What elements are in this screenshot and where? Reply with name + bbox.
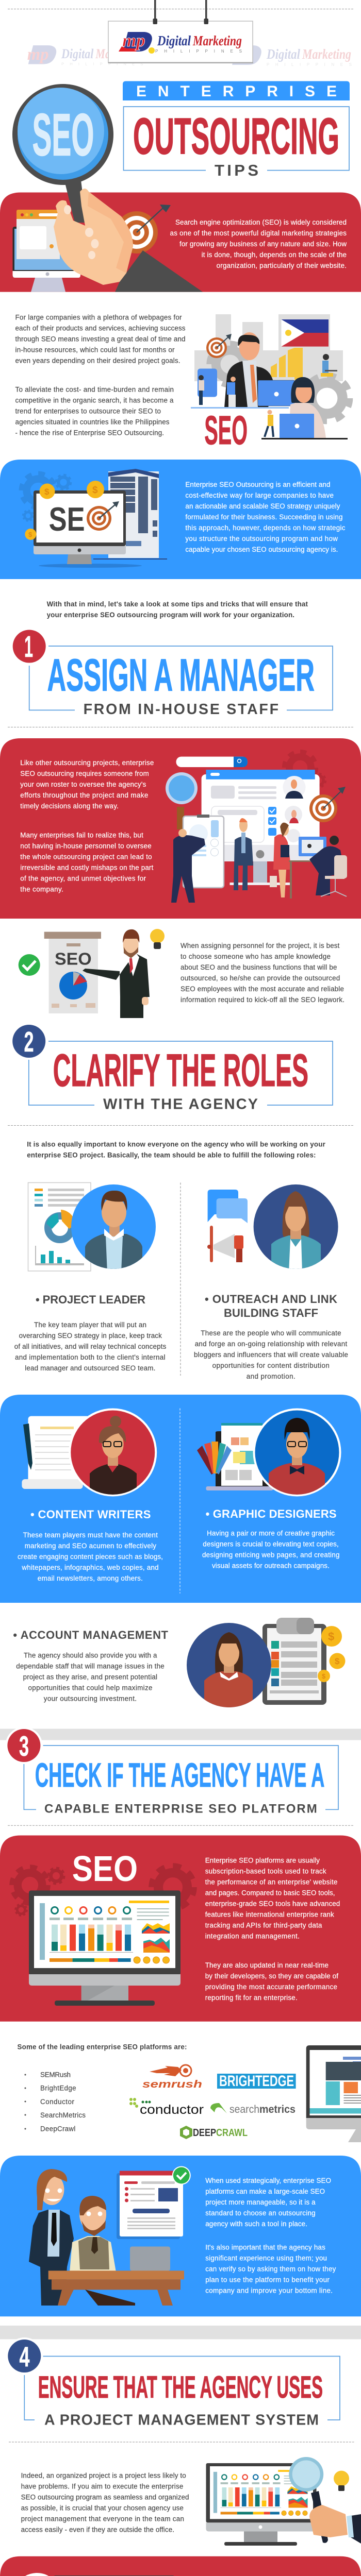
dashed divider	[8, 1825, 353, 1826]
role description: lead manager and outsourced SEO team.	[25, 1364, 155, 1372]
role description: overarching SEO strategy in place, keep track	[19, 1332, 162, 1340]
list: SEO platforms: Conductor	[40, 2098, 75, 2106]
icon: light bulb	[150, 929, 165, 949]
text: features like international enterprise rank	[205, 1910, 334, 1919]
illustration: dashboard monitor with magnifier and bulb	[206, 2457, 361, 2546]
role description: marketing and SEO acumen to effectively	[25, 1542, 156, 1550]
text: Like other outsourcing projects, enterprise	[20, 759, 154, 767]
text: project more manageable, so it is a	[205, 2198, 316, 2206]
text block: with that in mind: your enterprise SEO outsourcing program will work for your organization.	[47, 611, 294, 619]
logo: Marketing	[192, 33, 242, 48]
role description: your outsourcing investment.	[44, 1695, 137, 1702]
role description: dependable staff that will manage issues in the	[16, 1662, 165, 1670]
logo: brightedge: BRIGHTEDGE	[219, 2073, 294, 2090]
text: this approach, however, depends on how strategic	[185, 524, 346, 532]
ghost logo right	[232, 45, 352, 67]
text block: to alleviate	[15, 385, 174, 437]
text: tracking and APIs for third-party data	[205, 1922, 322, 1929]
logo: Digital	[157, 33, 191, 48]
text: of the agency, and unmet objectives for	[20, 875, 146, 882]
heading: tip 1: FROM IN-HOUSE STAFF	[84, 701, 278, 718]
text: When used strategically, enterprise SEO	[205, 2177, 331, 2184]
role description: These team players must have the content	[23, 1531, 158, 1539]
intro text: organization, particularly of their website.	[217, 262, 347, 269]
text: the whole outsourcing project can lead to	[20, 853, 152, 860]
band: section 4 gray	[0, 2326, 361, 2339]
illustration: outsourcing team with flag and SEO	[191, 314, 349, 453]
text: Many enterprises fail to realize this, but	[20, 832, 143, 839]
text block: organized project	[21, 2472, 189, 2534]
text block: team roles intro	[27, 1141, 326, 1159]
illustration: hand holding magnifying glass: SEO	[32, 101, 94, 168]
coins: $	[28, 531, 32, 538]
logo: conductor	[129, 2098, 204, 2117]
illustration: presenter with SEO board: SEO	[55, 950, 92, 969]
logo: searchmetrics	[210, 2103, 296, 2115]
band: section 3 gray	[0, 1729, 361, 1740]
text: the performance of an enterprise' website	[205, 1878, 337, 1886]
panel: strategic use blue	[0, 2156, 361, 2316]
ghost logo left: Marketing	[95, 46, 142, 61]
text: subscription-based tools used to track	[205, 1867, 326, 1875]
logo: PHILIPPINES	[155, 49, 242, 54]
text block: to alleviate: To alleviate the cost- and time-burden and remain	[15, 385, 174, 394]
flag	[282, 319, 329, 347]
role description: These are the people who will communicate	[201, 1329, 341, 1337]
role title: BUILDING STAFF	[224, 1307, 318, 1319]
text: capable your chosen SEO outsourcing agency is.	[185, 546, 338, 553]
illustration: monitor with dashboard	[12, 1849, 193, 2006]
heading: tip 1: 1	[24, 630, 33, 664]
heading: tip 4: A PROJECT MANAGEMENT SYSTEM	[44, 2412, 319, 2429]
hand	[309, 2505, 361, 2544]
text: standard to choose an outsourcing	[205, 2209, 316, 2217]
role description: opportunities for content distribution	[212, 1362, 330, 1369]
seated man and desk	[289, 836, 347, 899]
dashed divider	[8, 1125, 353, 1126]
panel: SEO platforms red	[0, 1835, 361, 2022]
browser card	[117, 2171, 183, 2239]
role title: • GRAPHIC DESIGNERS	[206, 1507, 337, 1520]
magnifier	[289, 2457, 328, 2543]
title: Outsourcing frame: TIPS	[215, 161, 258, 179]
woman	[289, 377, 326, 438]
text block: organized project: have problems. If you aim to execute the enterprise	[21, 2482, 183, 2490]
role description	[18, 1531, 163, 1582]
role description	[14, 1321, 167, 1372]
text block: when assigning personnel: to choose someone who has ample knowledge	[180, 953, 331, 960]
text: and pages. Compared to basic SEO tools,	[205, 1889, 335, 1897]
panel: assign a manager red	[0, 738, 361, 919]
text: not having in-house personnel to oversee	[20, 842, 152, 850]
text: cost-effective way for large companies to have	[185, 492, 334, 499]
role description	[194, 1329, 348, 1380]
text: SEO outsourcing requires someone from	[20, 770, 149, 777]
logo: deepcrawl: DEEP	[193, 2127, 216, 2139]
ghost logo left: Digital	[61, 46, 94, 61]
role title	[205, 1293, 337, 1319]
text: formulated for their business. Succeeding in using	[185, 513, 342, 521]
top dashed rule	[8, 8, 353, 9]
text block: organized project: project management that everyone in the team can	[21, 2515, 184, 2522]
illustration: cloud, servers and monitor	[10, 2573, 174, 2576]
intro text: Search engine optimization (SEO) is widely considered	[175, 218, 347, 226]
text block: when assigning personnel: outsourced, so he/she can provide the outsourced	[180, 974, 340, 982]
text: integration and management.	[205, 1932, 300, 1940]
text block: when assigning personnel: SEO employees with the most accurate and reliable	[180, 985, 344, 993]
illustration: two men at desk with browser card	[29, 2166, 191, 2306]
ghost logo right: Digital	[266, 46, 300, 62]
standing man	[29, 2169, 74, 2306]
ghost logo right: PHILIPPINES	[267, 62, 352, 67]
role: graphic designers	[197, 1409, 341, 1569]
text: by their developers, so they are capable of	[205, 1972, 338, 1980]
role description: whitepapers, infographics, web copies, and	[21, 1564, 159, 1571]
heading: tip 2	[12, 1025, 333, 1113]
text block: organized project: access easily - even if they are outside the office.	[21, 2526, 174, 2534]
text: the company.	[20, 885, 63, 893]
text block: to alleviate: trend for enterprises to outsource their SEO to	[15, 407, 161, 415]
text block: to alleviate: agencies situated in countries like the Philippines	[15, 418, 170, 426]
man left	[171, 829, 205, 903]
man	[83, 929, 150, 1018]
list: SEO platforms: DeepCrawl	[40, 2125, 75, 2133]
man in suit	[224, 332, 274, 408]
pie chart	[59, 972, 87, 999]
role: content writers	[18, 1409, 163, 1582]
role description: bloggers and influencers that will create valuable	[194, 1351, 348, 1359]
role description	[202, 1529, 339, 1569]
text block: organized project: Indeed, an organized project is a project less likely to	[21, 2472, 186, 2479]
icon: green check	[19, 954, 40, 976]
text block: to alleviate: competitive in the organic search, it has become a	[15, 397, 174, 404]
role title: • CONTENT WRITERS	[30, 1508, 151, 1521]
text	[205, 2177, 336, 2295]
text	[185, 481, 346, 553]
text block: when assigning personnel: When assigning personnel for the project, it is best	[180, 942, 340, 950]
seated man	[70, 2196, 116, 2272]
logo: deepcrawl: CRAWL	[216, 2127, 248, 2139]
text: providing the most accurate performance	[205, 1983, 337, 1991]
text block: with that in mind	[47, 600, 308, 619]
role description: project as they arise, and present potential	[23, 1673, 157, 1681]
SEO lettering: SEO	[204, 407, 248, 453]
illustration: presenter with SEO board	[19, 929, 165, 1018]
text block: for large companies: through SEO means investing a great deal of time and	[15, 335, 186, 343]
coins: $	[322, 1672, 326, 1680]
building	[93, 469, 167, 560]
role description: and forge an on-going relationship with relevant	[195, 1340, 347, 1348]
text: can verify so by asking them on how they	[205, 2265, 336, 2273]
intro text: as one of the most powerful digital marketing strategies	[170, 229, 347, 237]
coins: $	[335, 1656, 340, 1666]
heading: tip 2: WITH THE AGENCY	[103, 1096, 258, 1113]
text: timely decisions along the way.	[20, 802, 119, 810]
role description: of all initiatives, and will relay technical concepts	[14, 1343, 167, 1350]
heading: tip 4: 4	[20, 2341, 30, 2372]
heading: tip 1	[13, 630, 333, 718]
text block: for large companies	[15, 313, 186, 365]
dashed divider	[8, 726, 353, 727]
text: plan to use the platform to benefit your	[205, 2276, 330, 2284]
role description: create engaging content pieces such as blogs,	[18, 1553, 163, 1561]
ghost logo left	[27, 45, 143, 66]
coins: $	[44, 487, 50, 497]
text block: platform list heading: Some of the leading enterprise SEO platforms are:	[18, 2043, 187, 2051]
text block: when assigning personnel	[180, 942, 344, 1004]
role title: • ACCOUNT MANAGEMENT	[13, 1629, 169, 1641]
text: Enterprise SEO Outsourcing is an efficient and	[185, 481, 330, 488]
panel: intro red	[0, 193, 361, 292]
list: SEO platforms	[25, 2071, 86, 2133]
role: project leader	[14, 1183, 167, 1372]
text: platforms can make a large-scale SEO	[205, 2188, 325, 2195]
text	[205, 1857, 340, 2002]
text block: for large companies: even years depending on their desired project goals.	[15, 357, 180, 365]
list: SEO platforms: SEMRush	[40, 2071, 71, 2078]
list: SEO platforms: SearchMetrics	[40, 2111, 86, 2119]
text: enterprise-grade SEO tools have advanced	[205, 1900, 340, 1907]
logo: semrush: semrush	[142, 2079, 202, 2090]
intro text: it is done, though, depends on the scale of the	[202, 251, 347, 259]
role description: and promotion.	[247, 1372, 296, 1380]
icon: target with arrow	[116, 205, 171, 253]
logo: semrush	[142, 2065, 202, 2090]
man center	[234, 818, 253, 890]
role description: designers is crucial to elevating text copies,	[203, 1540, 339, 1548]
icon: laptop and colour swatches	[197, 1423, 273, 1490]
text block: to alleviate: - hence the rise of Enterprise SEO Outsourcing.	[15, 429, 164, 437]
monitor with SEO	[34, 490, 142, 568]
text: Enterprise SEO platforms are usually	[205, 1857, 320, 1864]
text: your own roster to oversee the agency's	[20, 781, 146, 788]
role: outreach and link building staff	[194, 1184, 348, 1380]
icon: clipboard	[262, 1618, 326, 1705]
role description: email newsletters, among others.	[38, 1574, 143, 1582]
role description: The key team player that will put an	[34, 1321, 146, 1329]
heading: tip 3: 3	[19, 1730, 29, 1762]
role description: and implementation both to the client's internal	[15, 1353, 166, 1361]
icon: report document	[28, 1183, 91, 1271]
logo: searchmetrics: metrics	[259, 2104, 296, 2115]
gear	[305, 376, 349, 420]
icon: speech bubbles and megaphone	[207, 1190, 248, 1262]
intro text	[170, 218, 347, 269]
logo	[119, 30, 242, 54]
dashed divider	[9, 2442, 354, 2443]
ghost logo left: mp	[27, 45, 48, 64]
icon: paper and pen	[22, 1416, 90, 1489]
illustration: hiring dashboard with people	[166, 752, 347, 903]
divider: vertical dashed	[180, 1183, 181, 1376]
text: reporting fit for an enterprise.	[205, 1994, 298, 2002]
coins: $	[92, 485, 98, 496]
ghost logo right: Marketing	[302, 46, 351, 62]
coins: $	[328, 1630, 334, 1643]
text: company and improve your bottom line.	[205, 2287, 333, 2295]
icon: monitor cropped right	[306, 2045, 361, 2142]
role description: opportunities that could help maximize	[28, 1684, 153, 1692]
icon: desktop monitor	[12, 210, 80, 292]
heading: tip 3	[5, 1727, 338, 1816]
text block: for large companies: For large companies with a plethora of webpages for	[15, 313, 182, 321]
panel: writers and designers blue	[0, 1395, 361, 1603]
text block: with that in mind: With that in mind, let's take a look at some tips and tricks that will ensure that	[47, 600, 308, 608]
hanging sign with logo	[108, 0, 253, 63]
heading: tip 2: 2	[24, 1026, 34, 1058]
panel: basecamp red	[0, 2556, 361, 2576]
text block: organized project: as possible, it is crucial that your chosen agency use	[21, 2504, 184, 2512]
logo: conductor: conductor	[140, 2103, 204, 2117]
role title: • PROJECT LEADER	[36, 1293, 145, 1306]
monitor with SEO: SE	[49, 500, 85, 538]
woman	[270, 823, 291, 897]
illustration: monitor with dashboard: SEO	[72, 1849, 138, 1889]
icon: green check	[172, 2166, 191, 2184]
ghost logo left: PHILIPPINES	[61, 61, 143, 66]
laptop and desk	[48, 2246, 184, 2306]
text block: when assigning personnel: information required to kick-off all the SEO legwork.	[180, 996, 344, 1004]
role description: designing enticing web pages, and creating	[202, 1551, 339, 1559]
text block: when assigning personnel: about SEO and the business functions that will be	[180, 963, 337, 971]
text block: team roles intro: enterprise SEO project. Basically, the team should be able to fulfill the following roles:	[27, 1151, 316, 1159]
text: efforts throughout the project and make	[20, 791, 148, 799]
text	[20, 759, 154, 893]
role title: • OUTREACH AND LINK	[205, 1293, 337, 1306]
logo: deepcrawl	[180, 2126, 248, 2139]
text: They are also updated in near real-time	[205, 1961, 329, 1969]
text block: for large companies: each of their products and services, achieving success	[15, 325, 186, 332]
text block: team roles intro: It is also equally important to know everyone on the agency who will be working on your	[27, 1141, 326, 1148]
list: SEO platforms: BrightEdge	[40, 2084, 76, 2092]
logo: searchmetrics: search	[229, 2104, 259, 2115]
heading: tip 3: CAPABLE ENTERPRISE SEO PLATFORM	[44, 1802, 317, 1816]
text: significant experience using them; you	[205, 2255, 327, 2262]
role: account management	[13, 1618, 345, 1710]
text block: for large companies: in-house resources, which could last for months or	[15, 346, 175, 353]
text: an actionable and scalable SEO strategy uniquely	[185, 502, 340, 510]
role description	[16, 1652, 165, 1702]
logo: mp	[122, 30, 145, 50]
text: agency with such a tool in place.	[205, 2220, 307, 2228]
text: It's also important that the agency has	[205, 2244, 325, 2251]
title: Enterprise banner: ENTERPRISE	[136, 83, 337, 100]
role description: The agency should also provide you with a	[24, 1652, 157, 1659]
role description: visual assets for outreach campaigns.	[212, 1562, 330, 1569]
panel: enterprise SEO outsourcing blue	[0, 460, 361, 579]
bulb	[334, 2471, 349, 2491]
text: irreversible and costly mishaps on the part	[20, 863, 154, 872]
intro text: for growing any business of any nature and size. How	[179, 240, 347, 248]
text: you structure the outsourcing program and how	[185, 535, 338, 543]
illustration: hand holding magnifying glass	[12, 84, 203, 292]
text block: organized project: SEO outsourcing program as seamless and organized	[21, 2494, 189, 2501]
coins	[25, 481, 104, 540]
coins	[318, 1626, 346, 1682]
role description: Having a pair or more of creative graphic	[207, 1529, 335, 1537]
heading: tip 4	[6, 2337, 340, 2429]
